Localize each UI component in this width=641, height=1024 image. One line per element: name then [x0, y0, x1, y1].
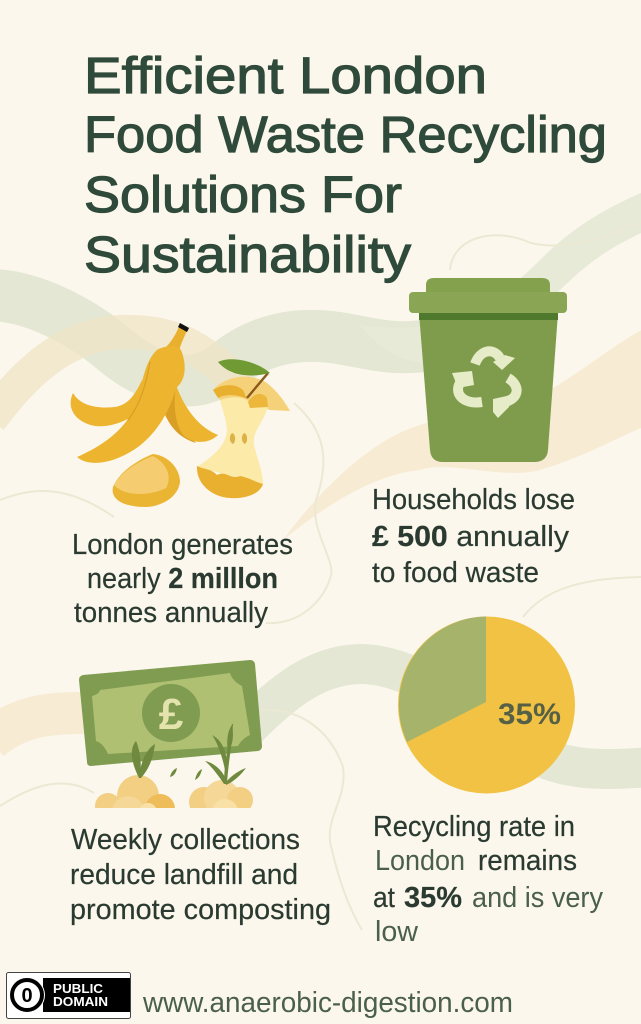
icon: banana peel	[71, 323, 218, 463]
icon: recycle symbol	[452, 351, 517, 418]
icon: fruit peel piece	[113, 454, 180, 507]
title	[84, 47, 607, 283]
text: Weekly collections: Weekly collections	[71, 824, 300, 856]
text: Recycling rate: London	[375, 845, 465, 877]
icon: apple core	[197, 359, 290, 498]
title: Solutions For	[84, 166, 402, 223]
badge: public domain: 0	[21, 985, 33, 1007]
pie chart: recycling rate	[398, 616, 575, 794]
text: Recycling rate: Recycling rate in	[373, 811, 575, 843]
icon: banknote	[79, 660, 262, 766]
icon: compost piles	[95, 775, 253, 808]
footer url: www.anaerobic-digestion.com	[142, 987, 513, 1019]
panel: food scraps	[71, 323, 290, 507]
text: London generates: London generates	[72, 529, 293, 561]
text: London generates: tonnes annually	[74, 597, 269, 629]
badge: public domain	[6, 972, 130, 1018]
text: Weekly collections: reduce landfill and	[70, 859, 298, 891]
text: Recycling rate: at	[373, 882, 395, 914]
text: Households lose: Households lose	[372, 484, 575, 516]
badge: public domain: PUBLIC	[53, 981, 104, 996]
text: Households lose: to food waste	[372, 557, 539, 589]
title: Efficient London	[84, 47, 487, 104]
text: London generates	[72, 529, 293, 629]
text: Households lose	[372, 484, 575, 589]
text: Recycling rate: 35%	[404, 882, 462, 914]
pie chart: recycling rate: 35%	[498, 698, 561, 731]
text: Recycling rate	[373, 811, 604, 948]
icon: banknote: £	[159, 690, 184, 739]
text: Recycling rate: low	[375, 916, 418, 948]
icon: recycling bin	[409, 278, 567, 462]
title: Sustainability	[84, 226, 412, 283]
text: Weekly collections: promote composting	[70, 894, 331, 926]
text: Recycling rate: and is very	[472, 882, 604, 914]
text: Weekly collections	[70, 824, 331, 926]
panel: money and compost	[79, 660, 262, 808]
text: Recycling rate: remains	[478, 845, 577, 877]
text: Households lose: £ 500 annually	[372, 521, 570, 553]
text: London generates: nearly 2 milllon	[87, 563, 278, 595]
icon: sprouts	[132, 724, 246, 785]
title: Food Waste Recycling	[84, 106, 607, 163]
badge: public domain: DOMAIN	[53, 994, 108, 1009]
